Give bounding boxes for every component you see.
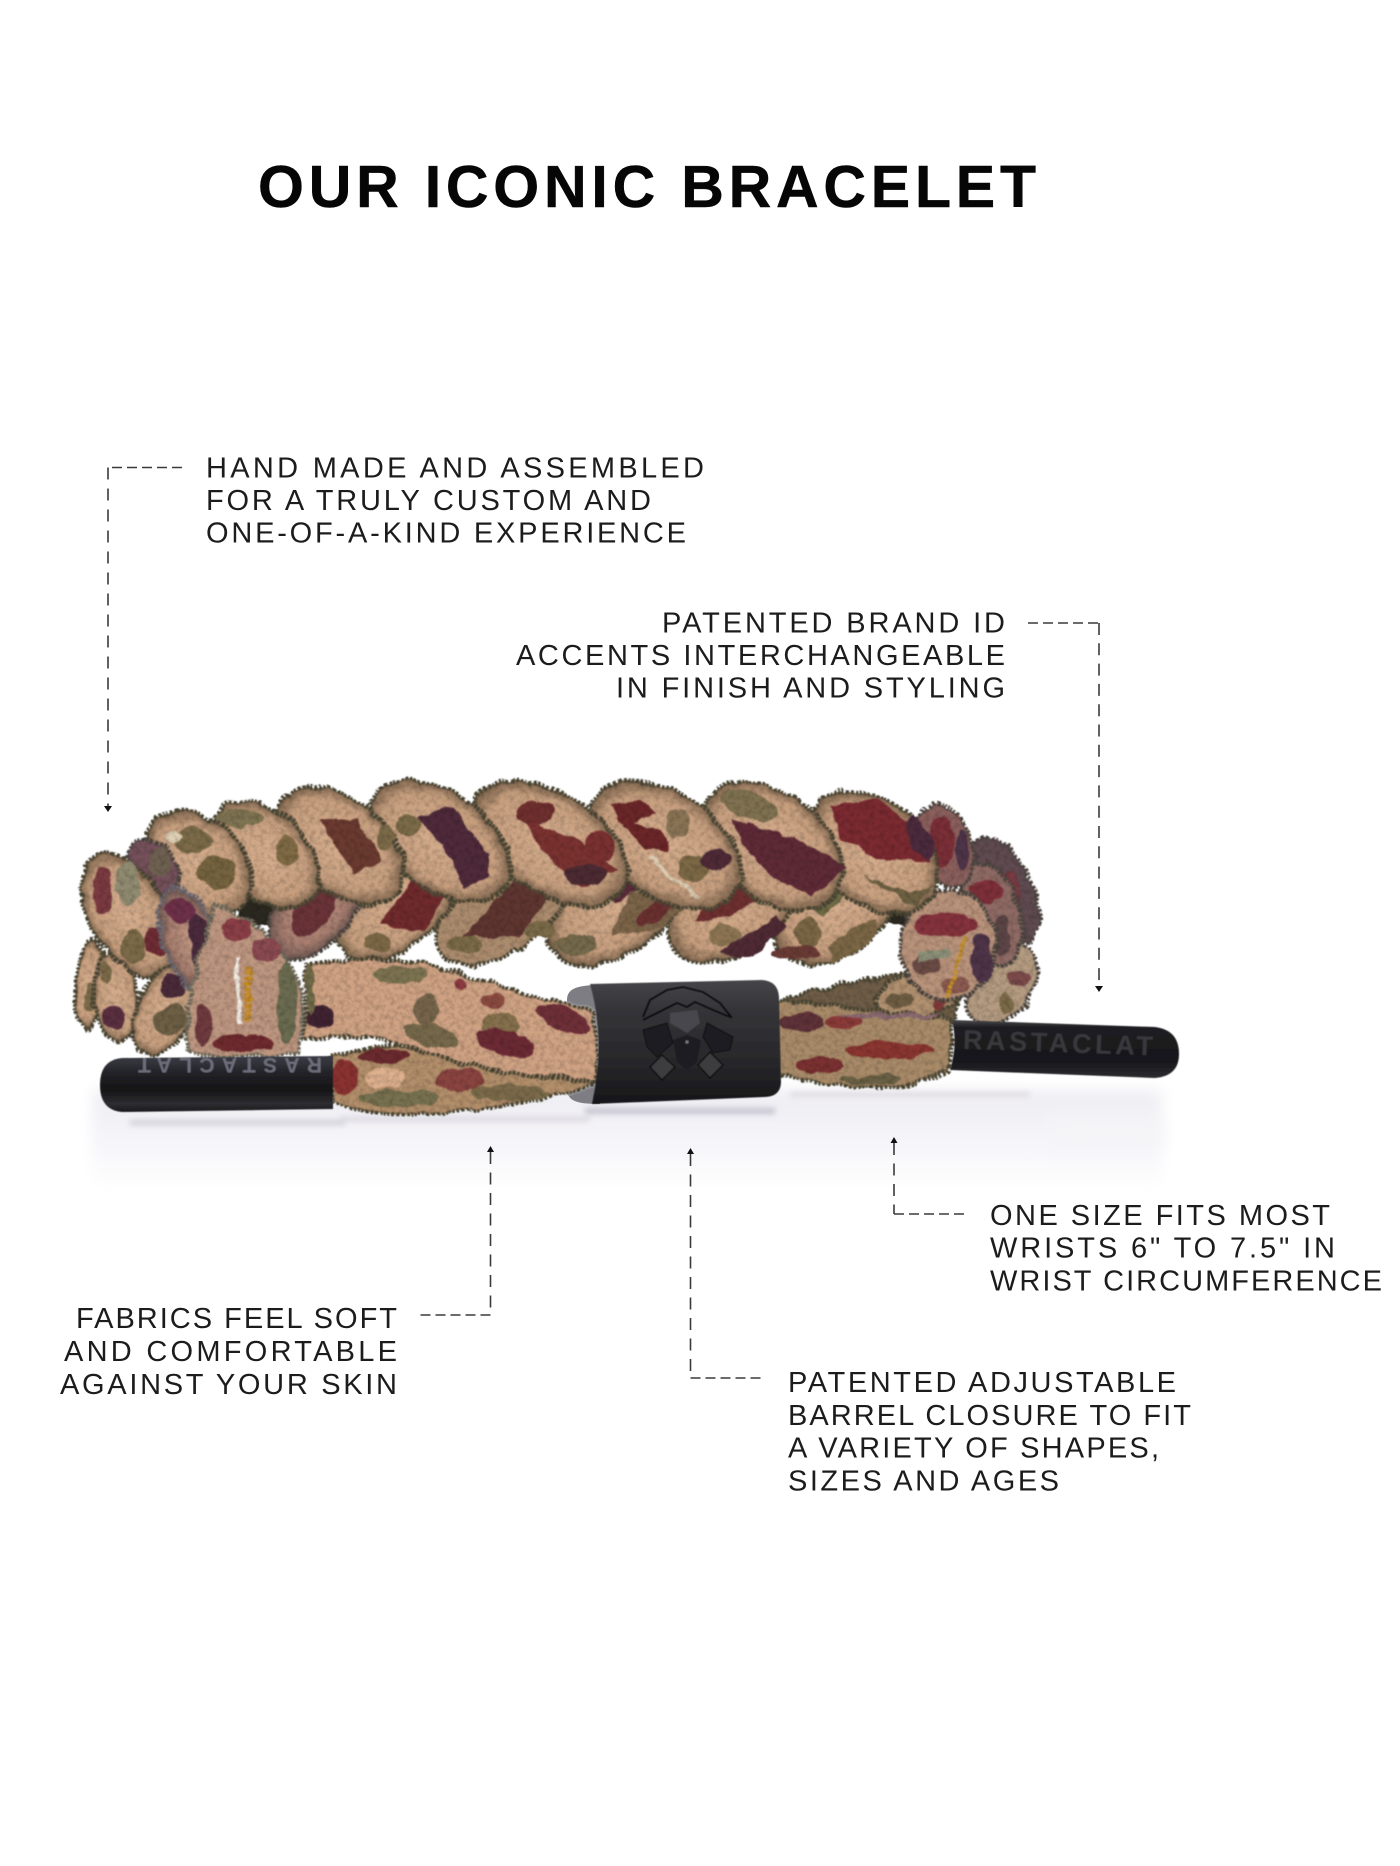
callout: barrel closure: SIZES AND AGES: [788, 1466, 1059, 1498]
callout: one size: WRIST CIRCUMFERENCE: [990, 1266, 1382, 1298]
tip lettering: RASTACLAT: [962, 1025, 1154, 1061]
arrow: brand id leader: [1028, 623, 1103, 992]
callout: one size: [990, 1200, 1382, 1298]
callout: fabrics: AND COMFORTABLE: [64, 1336, 397, 1368]
right strand back: [770, 973, 960, 1022]
arrow: hand made leader: [104, 468, 182, 812]
bracelet shadow: [92, 1090, 1162, 1190]
right knot: [872, 794, 1054, 1039]
left knot: [61, 828, 303, 1065]
upper left strand: [305, 959, 596, 1082]
right tip: [950, 1020, 1179, 1078]
tip lettering: RASTACLAT: [138, 1053, 322, 1076]
callout: brand id: IN FINISH AND STYLING: [616, 672, 1005, 704]
callout: fabrics: [60, 1303, 397, 1401]
callout: hand made: [206, 452, 704, 550]
callout: fabrics: AGAINST YOUR SKIN: [60, 1369, 397, 1401]
lower braid strands: [251, 812, 926, 992]
icon: lion emblem: [643, 987, 733, 1080]
upper braid strands: [124, 754, 963, 939]
barrel body: [590, 980, 781, 1104]
callout: brand id: PATENTED BRAND ID: [662, 608, 1005, 640]
arrow: fabrics leader: [417, 1146, 494, 1315]
callout: barrel closure: PATENTED ADJUSTABLE: [788, 1367, 1176, 1399]
barrel rim: [567, 985, 600, 1104]
right knot threads: [917, 937, 967, 997]
callout: brand id: [516, 608, 1005, 704]
barrel closure: [590, 980, 781, 1104]
braid backing: [240, 845, 930, 925]
callout: brand id: ACCENTS INTERCHANGEABLE: [516, 640, 1005, 672]
callout: barrel closure: BARREL CLOSURE TO FIT: [788, 1400, 1191, 1432]
callout: barrel closure: A VARIETY OF SHAPES,: [788, 1433, 1159, 1465]
lower left strand: [329, 1045, 596, 1115]
right strand front: [770, 1000, 953, 1088]
callout: barrel closure: [788, 1367, 1191, 1498]
arrow: barrel leader: [687, 1148, 764, 1378]
callout: hand made: HAND MADE AND ASSEMBLED: [206, 452, 704, 484]
callout: one size: ONE SIZE FITS MOST: [990, 1200, 1330, 1232]
callout: hand made: FOR A TRULY CUSTOM AND: [206, 485, 651, 517]
callout: fabrics: FABRICS FEEL SOFT: [76, 1303, 397, 1335]
bracelet fabric: braid, knots and strands: [61, 754, 1054, 1115]
callout: one size: WRISTS 6" TO 7.5" IN: [990, 1233, 1335, 1265]
arrow: size leader: [890, 1137, 968, 1214]
title: OUR ICONIC BRACELET: [258, 154, 1036, 220]
callout: hand made: ONE-OF-A-KIND EXPERIENCE: [206, 518, 686, 550]
left tip: [100, 1053, 333, 1112]
